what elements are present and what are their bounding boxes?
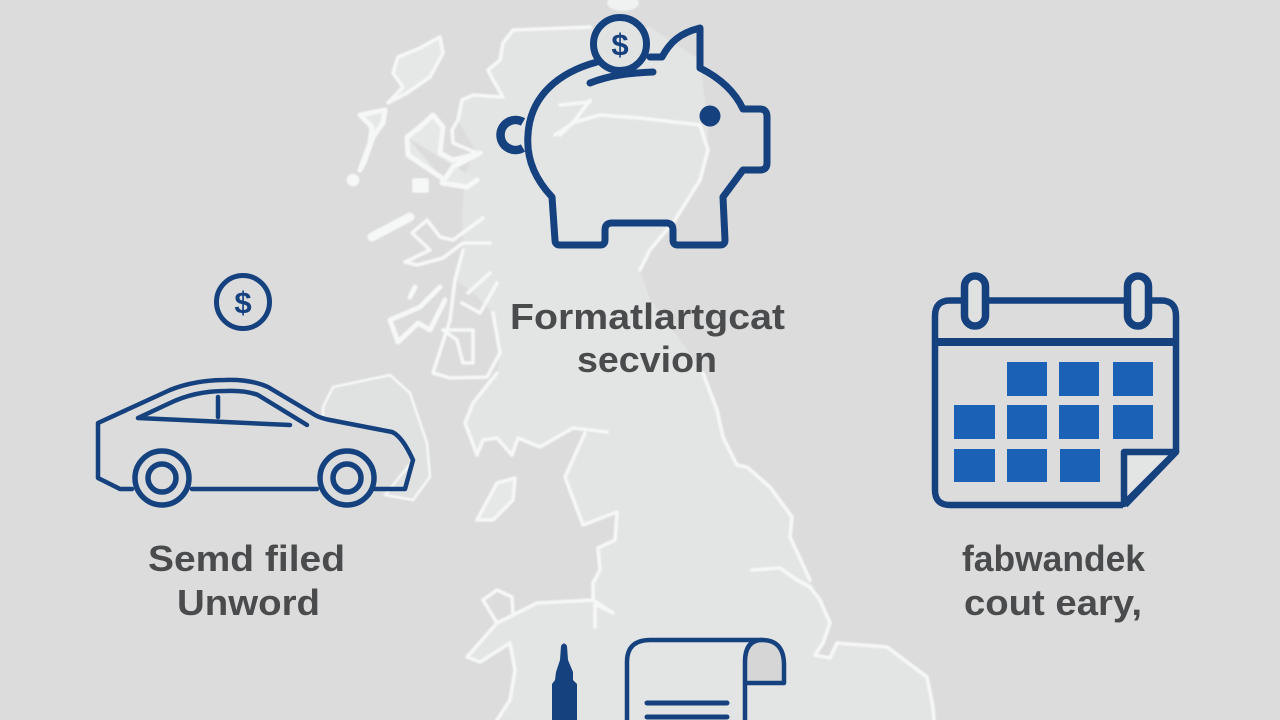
icon: calendar — [935, 276, 1176, 505]
dollar glyph on piggy coin: $ — [611, 27, 629, 62]
Kintyre and Arran — [390, 287, 445, 342]
piggy bank tail — [501, 120, 523, 150]
car label line 2: Unword — [177, 582, 320, 623]
calendar header rule — [935, 338, 1176, 346]
icon: pen — [552, 644, 577, 720]
coin with dollar sign — [594, 18, 646, 70]
car body — [98, 380, 413, 489]
Argyll coast — [405, 218, 500, 378]
small island dot — [348, 176, 358, 184]
Isle of Man — [477, 478, 515, 520]
text: calendar label — [962, 538, 1146, 623]
Mull island — [372, 217, 410, 237]
heading: central label — [510, 296, 785, 380]
car wheels — [135, 451, 189, 505]
Skye island — [407, 115, 480, 187]
icon: dollar coin above car: $ — [234, 285, 252, 320]
piggy bank slot — [590, 72, 653, 83]
map of the UK — [323, 0, 934, 720]
scroll page — [627, 640, 762, 720]
icon: document scroll — [627, 640, 784, 720]
northeast coast line through the pig icon — [555, 115, 708, 270]
calendar frame — [935, 300, 1176, 505]
mainland — [455, 27, 934, 720]
northwest coast of Scotland — [452, 27, 590, 153]
car windows — [138, 391, 307, 425]
east coast of England — [703, 373, 934, 720]
scroll curl — [745, 640, 784, 720]
car label line 1: Semd filed — [148, 538, 345, 579]
calendar page fold — [1124, 452, 1176, 504]
calendar binder rings — [964, 276, 986, 326]
text: car label — [148, 538, 345, 623]
icon: piggy bank — [501, 18, 767, 245]
icon: car — [98, 380, 413, 505]
calendar label line 1: fabwandek — [962, 538, 1146, 579]
Lewis island — [388, 37, 443, 103]
icon: dollar coin above car — [216, 276, 270, 328]
piggy bank eye — [700, 106, 720, 126]
calendar day squares — [954, 362, 1153, 482]
central label line 2: secvion — [577, 339, 717, 380]
west coast of England and Wales — [465, 373, 617, 720]
Ireland coast fragment — [323, 375, 430, 500]
Shetland blob at top — [607, 0, 639, 11]
central label line 1: Formatlartgcat — [510, 296, 785, 337]
Uist islands — [360, 110, 385, 170]
scroll text lines — [647, 703, 727, 717]
piggy bank body — [528, 28, 767, 245]
calendar label line 2: cout eary, — [964, 582, 1142, 623]
